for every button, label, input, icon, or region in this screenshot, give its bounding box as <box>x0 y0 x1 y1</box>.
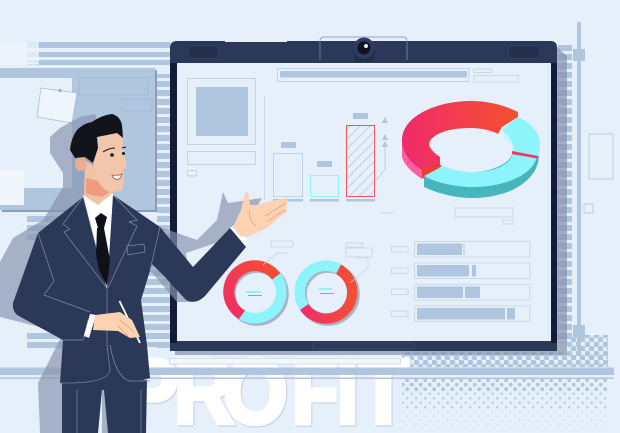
jacket <box>13 195 246 387</box>
3D donut chart <box>402 101 540 198</box>
bar chart <box>264 96 388 202</box>
hair <box>70 114 123 163</box>
left wall stripes <box>0 42 171 350</box>
black tie <box>95 213 110 286</box>
donut chart left <box>223 241 293 320</box>
left background panel <box>0 68 157 212</box>
donut chart right <box>300 243 372 324</box>
pen and lower hand <box>84 301 140 343</box>
small text boxes under 3D donut <box>380 208 513 224</box>
pointing hand <box>230 192 288 246</box>
top title bar <box>278 68 518 82</box>
man's cast shadow <box>0 114 262 433</box>
right wall details <box>558 22 613 352</box>
left image placeholder <box>188 78 256 176</box>
webcam <box>320 37 407 62</box>
trousers <box>62 380 147 433</box>
neck and face <box>75 131 127 212</box>
presenter figure <box>13 114 288 433</box>
horizontal progress bars <box>392 242 530 322</box>
shirt collar <box>83 193 115 287</box>
screen shadow <box>175 47 567 355</box>
outlined strip above the word <box>170 358 400 364</box>
horizontal floor band <box>0 368 614 379</box>
jacket seams <box>38 195 160 433</box>
presentation screen frame <box>170 41 557 351</box>
halftone dot pattern <box>402 335 608 426</box>
